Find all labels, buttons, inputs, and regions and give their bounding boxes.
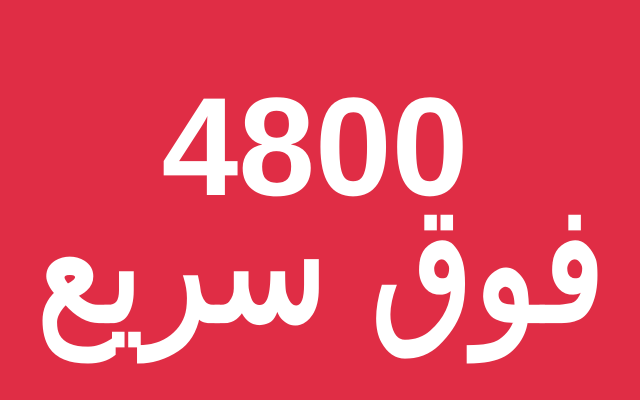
heading: Arabic text: فوق سريع: [36, 167, 606, 361]
heading: number 4800: 4800: [162, 68, 468, 225]
